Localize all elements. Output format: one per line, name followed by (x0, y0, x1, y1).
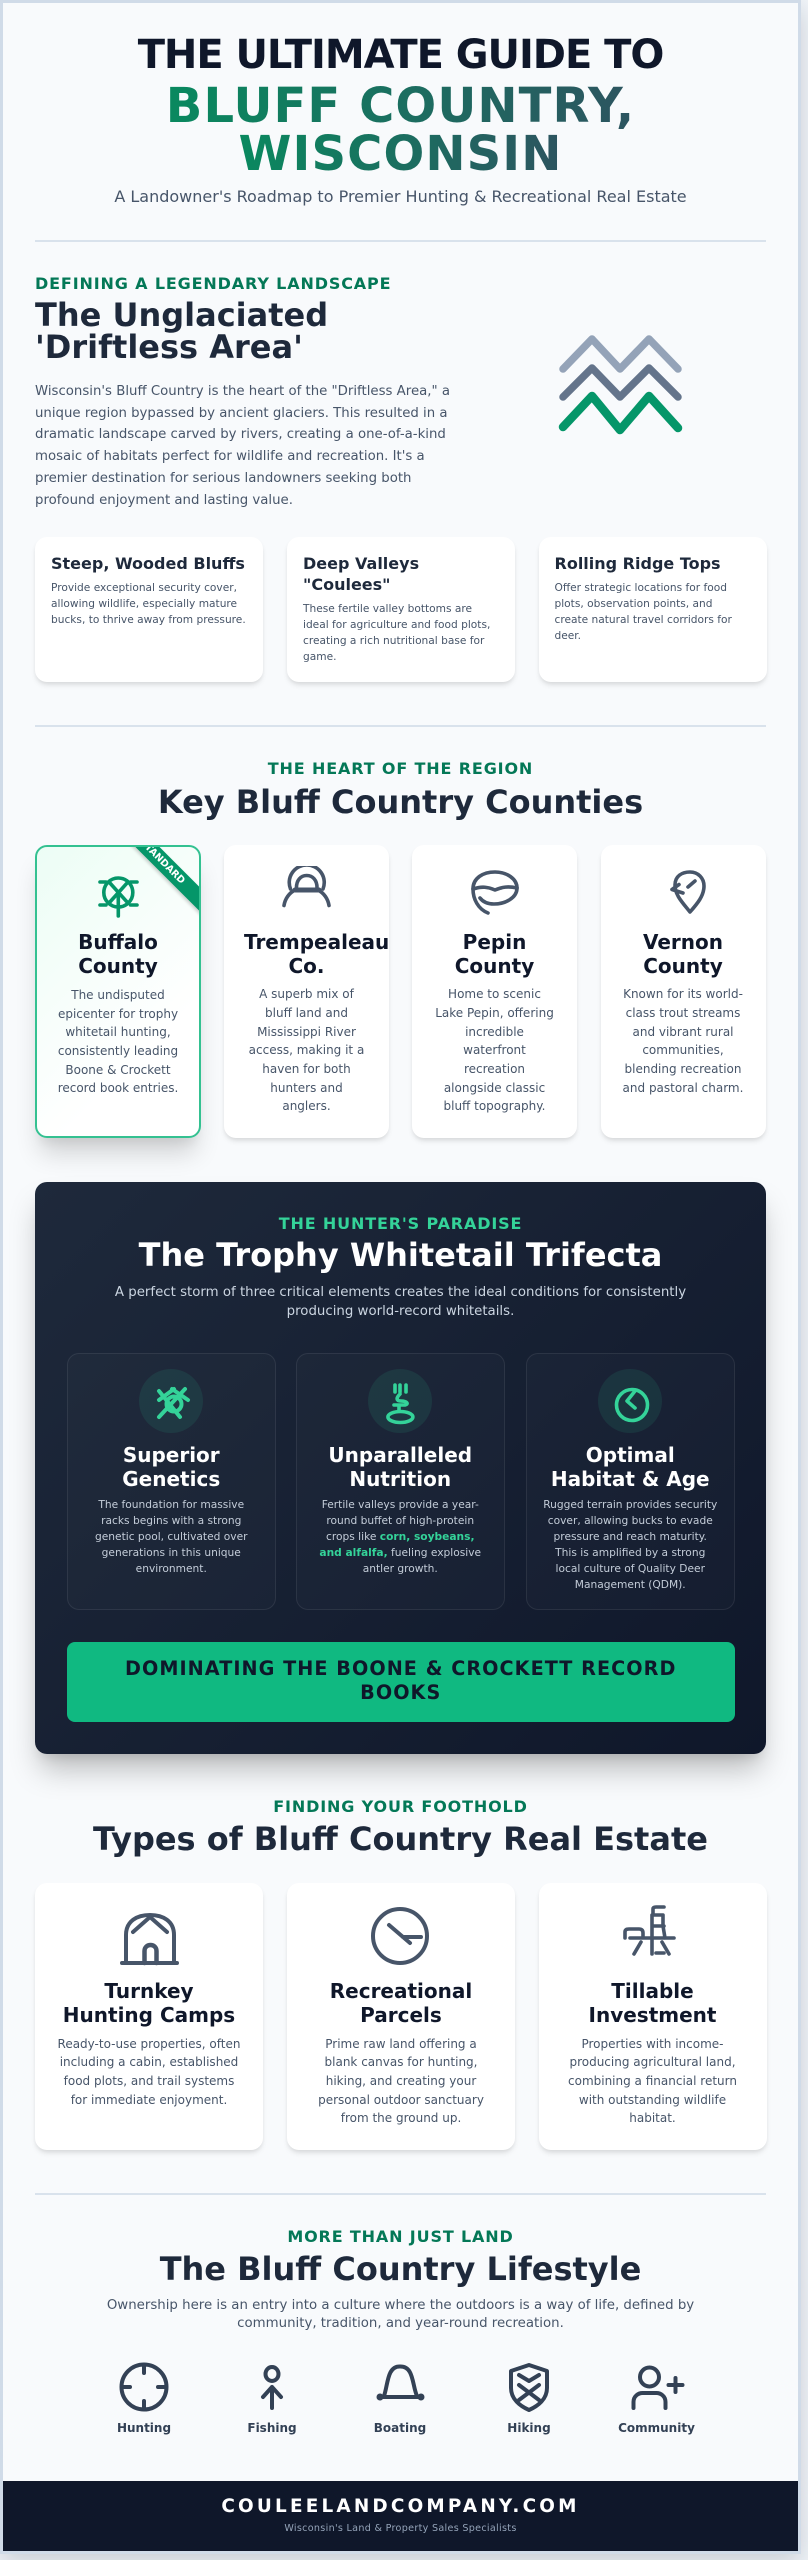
icon: farm silo (623, 1905, 676, 1956)
icon: genetics (156, 1386, 190, 1420)
card: unparalleled nutrition (296, 1353, 504, 1610)
title highlight: Bluff Country, Wisconsin: WISCONSIN (238, 126, 563, 182)
paragraph: driftless intro (35, 384, 450, 508)
card: tillable investment (538, 1883, 766, 2150)
card: Trempealeau Co.: hunters and (270, 1081, 343, 1095)
card: Vernon County: class trout streams (626, 1006, 740, 1020)
card: turnkey hunting camps: Hunting Camps (63, 2003, 235, 2027)
card: deep valleys coulees: Deep Valleys (303, 554, 419, 573)
card: deep valleys coulees: "Coulees" (303, 575, 391, 594)
paragraph: driftless intro: dramatic landscape carved by rivers, creating a one-of-a-kind (35, 427, 446, 442)
title line: the ultimate guide to: THE ULTIMATE GUIDE TO (138, 32, 663, 78)
card: Buffalo County: epicenter for trophy (58, 1007, 178, 1021)
card: optimal habitat and age (526, 1353, 734, 1610)
card: Trempealeau Co.: bluff land and (265, 1006, 348, 1020)
card: turnkey hunting camps (35, 1883, 263, 2150)
eyebrow: finding your foothold: FINDING YOUR FOOTHOLD (273, 1797, 528, 1816)
card: deep valleys coulees: ideal for agriculture and food plots, (303, 618, 490, 631)
card: unparalleled nutrition: Fertile valleys provide a year- (322, 1498, 479, 1511)
card: superior genetics: racks begins with a strong (101, 1514, 241, 1527)
icon group: fishing (247, 2365, 297, 2435)
card: Pepin County: incredible (465, 1025, 524, 1039)
paragraph: lifestyle intro: community, tradition, and year-round recreation. (237, 2316, 564, 2331)
paragraph: driftless intro: mosaic of habitats perfect for wildlife and recreation. It's a (35, 449, 425, 464)
card: tillable investment: with outstanding wildlife (579, 2093, 726, 2107)
heading: the unglaciated driftless area (35, 296, 328, 366)
card: tillable investment: habitat. (629, 2111, 676, 2125)
icon group: hunting (117, 2362, 171, 2435)
card: optimal habitat and age: pressure and reach maturity. (554, 1530, 707, 1543)
icon group: boating (374, 2364, 426, 2435)
card: unparalleled nutrition: Unparalleled (328, 1443, 472, 1467)
card: Pepin County (412, 845, 577, 1138)
card: recreational parcels: hiking, and creating your (326, 2074, 476, 2088)
icon group: boating: Boating (374, 2421, 426, 2435)
card: tillable investment: producing agricultural land, (569, 2055, 736, 2069)
card: Vernon County: communities, (642, 1043, 724, 1057)
banner: boone and crockett: DOMINATING THE BOONE & CROCKETT RECORD (125, 1657, 676, 1680)
eyebrow: heart of the region: THE HEART OF THE REGION (268, 759, 533, 778)
card: rolling ridge tops (538, 537, 766, 682)
card: Vernon County: and pastoral charm. (623, 1081, 743, 1095)
banner: boone and crockett (67, 1642, 734, 1722)
heading: types of real estate: Types of Bluff Country Real Estate (93, 1820, 708, 1858)
card: Trempealeau Co.: anglers. (282, 1099, 331, 1113)
card: Buffalo County: consistently leading (58, 1044, 178, 1058)
card: Vernon County: County (643, 954, 723, 978)
card: Buffalo County: County (78, 954, 158, 978)
ribbon: standard (114, 814, 226, 925)
card: superior genetics: environment. (136, 1562, 207, 1575)
paragraph: driftless intro: Wisconsin's Bluff Country is the heart of the "Driftless Area," a (35, 384, 450, 399)
card: superior genetics: generations in this unique (102, 1546, 241, 1559)
card: deep valleys coulees: game. (303, 650, 336, 663)
paragraph: lifestyle intro: Ownership here is an entry into a culture where the outdoors is a way of life, defined by (107, 2298, 694, 2313)
card: unparalleled nutrition: crops like corn, soybeans, (326, 1530, 475, 1543)
icon group: hunting: Hunting (117, 2421, 171, 2435)
paragraph: lifestyle intro (107, 2298, 694, 2331)
card: turnkey hunting camps: for immediate enjoyment. (71, 2093, 227, 2107)
card: optimal habitat and age: Management (QDM). (575, 1578, 686, 1591)
card: tillable investment: combining a financial return (568, 2074, 737, 2088)
icon group: community (618, 2366, 695, 2435)
paragraph: perfect storm (115, 1285, 686, 1319)
card: rolling ridge tops: deer. (554, 629, 581, 642)
title highlight: Bluff Country, Wisconsin: BLUFF COUNTRY, (166, 78, 635, 134)
panel: trophy whitetail trifecta (35, 1182, 766, 1754)
card: turnkey hunting camps: including a cabin, established (60, 2055, 238, 2069)
paragraph: perfect storm: producing world-record whitetails. (287, 1304, 514, 1319)
card: recreational parcels: Parcels (360, 2003, 442, 2027)
card: Pepin County: waterfront (463, 1043, 526, 1057)
card: Vernon County: Vernon (643, 930, 723, 954)
icon: compass clock (371, 1907, 429, 1965)
card: Buffalo County: Boone & Crockett (65, 1063, 171, 1077)
card: steep wooded bluffs: Steep, Wooded Bluffs (51, 554, 245, 573)
icon group: fishing: Fishing (247, 2421, 297, 2435)
card: Pepin County: alongside classic (444, 1081, 545, 1095)
card: Buffalo County: record book entries. (58, 1081, 178, 1095)
icon: nutrition (386, 1383, 415, 1424)
card: rolling ridge tops: create natural travel corridors for (554, 613, 732, 626)
card: optimal habitat and age: local culture of Quality Deer (556, 1562, 705, 1575)
card: Pepin County: Lake Pepin, offering (435, 1006, 554, 1020)
icon: arches (282, 866, 331, 908)
heading: the unglaciated driftless area: The Unglaciated (35, 296, 328, 334)
card: deep valleys coulees: These fertile valley bottoms are (303, 602, 472, 615)
card: Pepin County: Pepin (463, 930, 526, 954)
heading: the unglaciated driftless area: 'Driftless Area' (35, 328, 303, 366)
card: recreational parcels (287, 1883, 515, 2150)
card: tillable investment: Tillable (611, 1979, 694, 2003)
card: recreational parcels: Prime raw land offering a (325, 2037, 477, 2051)
card: optimal habitat and age: Rugged terrain provides security (543, 1498, 717, 1511)
card: Pepin County: recreation (464, 1062, 525, 1076)
icon group: hiking: Hiking (507, 2421, 551, 2435)
card: Vernon County: Known for its world- (623, 987, 743, 1001)
title highlight: Bluff Country, Wisconsin (166, 78, 635, 182)
card: optimal habitat and age: cover, allowing bucks to evade (548, 1514, 713, 1527)
card: unparalleled nutrition: antler growth. (363, 1562, 438, 1575)
heading: lifestyle: The Bluff Country Lifestyle (160, 2250, 641, 2288)
icon: hunting camp (120, 1913, 179, 1966)
card: superior genetics: The foundation for massive (98, 1498, 244, 1511)
icon group: hiking (507, 2363, 551, 2435)
card: rolling ridge tops: Offer strategic locations for food (554, 581, 727, 594)
card: Buffalo County: whitetail hunting, (65, 1025, 171, 1039)
card: superior genetics (67, 1353, 276, 1610)
card: recreational parcels: personal outdoor sanctuary (318, 2093, 484, 2107)
card: Vernon County: blending recreation (624, 1062, 741, 1076)
card: Pepin County: Home to scenic (448, 987, 541, 1001)
card: rolling ridge tops: Rolling Ridge Tops (554, 554, 721, 573)
card: Buffalo County: Buffalo (78, 930, 158, 954)
banner: boone and crockett: BOOKS (360, 1681, 441, 1704)
footer (3, 2481, 798, 2552)
card: rolling ridge tops: plots, observation points, and (554, 597, 713, 610)
card: Vernon County: and vibrant rural (632, 1025, 734, 1039)
card: unparalleled nutrition: and alfalfa, fueling explosive (319, 1546, 481, 1559)
card: optimal habitat and age: Optimal (586, 1443, 675, 1467)
card: unparalleled nutrition: Nutrition (349, 1467, 451, 1491)
eyebrow: more than just land: MORE THAN JUST LAND (287, 2227, 514, 2246)
card: Trempealeau Co. (224, 845, 389, 1138)
eyebrow: hunter's paradise: THE HUNTER'S PARADISE (279, 1214, 522, 1233)
icon: layered bluffs (558, 335, 682, 434)
card: steep wooded bluffs: Provide exceptional security cover, (51, 581, 237, 594)
card: Pepin County: County (455, 954, 534, 978)
card: Vernon County (600, 845, 766, 1138)
footer tagline: Wisconsin's Land & Property Sales Specialists (284, 2523, 517, 2534)
icon group: community: Community (618, 2421, 695, 2435)
card: recreational parcels: from the ground up. (341, 2111, 461, 2125)
card: turnkey hunting camps: Ready-to-use properties, often (58, 2037, 240, 2051)
card: Trempealeau Co.: Co. (288, 954, 324, 978)
card: Trempealeau Co.: access, making it a (249, 1043, 364, 1057)
card: tillable investment: Properties with income- (581, 2037, 724, 2051)
card: tillable investment: Investment (589, 2003, 716, 2027)
icon: map pin (670, 870, 706, 914)
footer website: COULEELANDCOMPANY.COM (221, 2496, 580, 2517)
icon: habitat dial (614, 1388, 650, 1422)
eyebrow: defining a legendary landscape: DEFINING A LEGENDARY LANDSCAPE (35, 274, 391, 293)
card: superior genetics: Superior (123, 1443, 220, 1467)
card: superior genetics: Genetics (122, 1467, 220, 1491)
card: optimal habitat and age: This is amplified by a strong (555, 1546, 705, 1559)
card: Trempealeau Co.: A superb mix of (259, 987, 354, 1001)
card: optimal habitat and age: Habitat & Age (551, 1467, 710, 1491)
card: Trempealeau Co.: Trempealeau (244, 930, 389, 954)
card: deep valleys coulees: creating a rich nutritional base for (303, 634, 484, 647)
paragraph: driftless intro: premier destination for serious landowners seeking both (35, 471, 412, 486)
heading: key counties: Key Bluff Country Counties (158, 783, 643, 821)
paragraph: driftless intro: profound enjoyment and lasting value. (35, 493, 293, 508)
card: Buffalo County: The undisputed (71, 988, 165, 1002)
card: Trempealeau Co.: Mississippi River (257, 1025, 356, 1039)
card: turnkey hunting camps: food plots, and trail systems (64, 2074, 234, 2088)
card: unparalleled nutrition: round buffet of high-protein (326, 1514, 474, 1527)
card: steep wooded bluffs: allowing wildlife, especially mature (51, 597, 237, 610)
card: Buffalo County (35, 845, 201, 1138)
icon: ship wheel (98, 876, 139, 918)
card: superior genetics: genetic pool, cultivated over (95, 1530, 248, 1543)
icon: lake leaf (471, 870, 519, 915)
subtitle: A Landowner's Roadmap to Premier Hunting & Recreational Real Estate (114, 187, 687, 206)
card: steep wooded bluffs (35, 537, 263, 682)
paragraph: driftless intro: unique region bypassed by ancient glaciers. This resulted in a (35, 406, 448, 421)
card: recreational parcels: blank canvas for hunting, (325, 2055, 477, 2069)
card: deep valleys coulees (287, 537, 515, 682)
card: Trempealeau Co.: haven for both (262, 1062, 351, 1076)
card: Pepin County: bluff topography. (444, 1099, 545, 1113)
card: steep wooded bluffs: bucks, to thrive away from pressure. (51, 613, 246, 626)
card: recreational parcels: Recreational (330, 1979, 472, 2003)
heading: trophy whitetail trifecta: The Trophy Whitetail Trifecta (139, 1236, 662, 1274)
card: turnkey hunting camps: Turnkey (104, 1979, 194, 2003)
paragraph: perfect storm: A perfect storm of three critical elements creates the ideal conditions for consistently (115, 1285, 686, 1300)
